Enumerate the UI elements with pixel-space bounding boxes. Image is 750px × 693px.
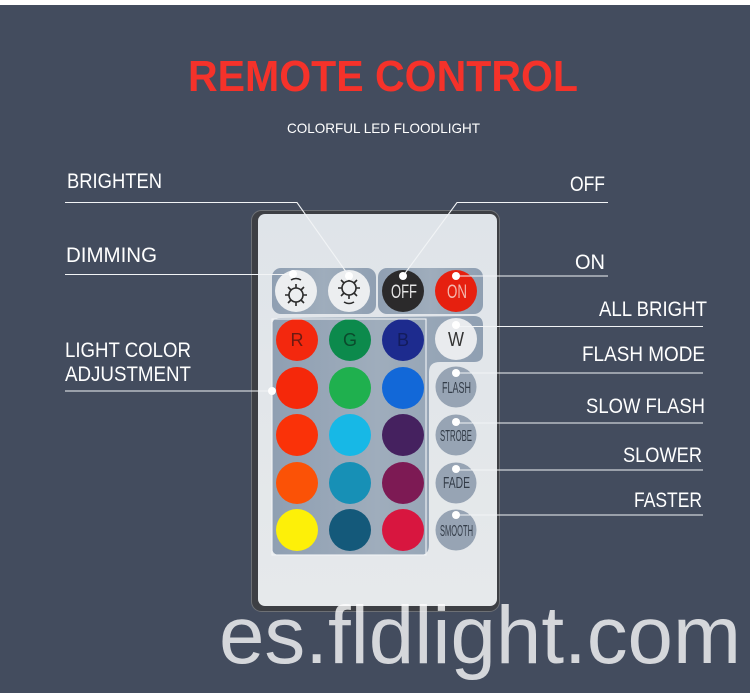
label: ON: ON <box>447 282 467 303</box>
left labels: LIGHT COLOR <box>65 339 191 362</box>
left labels: ADJUSTMENT <box>65 363 191 386</box>
colour buttons grid: G <box>343 330 357 350</box>
right labels: SLOW FLASH <box>586 395 705 418</box>
right labels: FLASH MODE <box>582 343 705 366</box>
icon: brighten sun <box>285 278 307 306</box>
labels: R G B: R <box>290 330 304 350</box>
right labels <box>570 173 707 512</box>
colour buttons grid <box>276 319 424 551</box>
mode buttons <box>436 366 476 550</box>
watermark: es.fldlight.com <box>219 590 741 681</box>
subtitle: COLORFUL LED FLOODLIGHT <box>287 120 480 136</box>
callout lines and dots <box>65 202 703 555</box>
right labels: ON <box>575 251 605 274</box>
right labels: SLOWER <box>623 444 702 467</box>
mode buttons: SMOOTH <box>440 523 473 540</box>
right labels: OFF <box>570 173 605 196</box>
callout dots <box>268 270 460 519</box>
W button: W <box>448 329 464 351</box>
remote control <box>252 210 500 612</box>
top row buttons <box>275 270 477 312</box>
colour buttons grid: B <box>397 330 409 350</box>
mode buttons: FADE <box>443 475 470 492</box>
right labels: FASTER <box>634 489 702 512</box>
icon: dimming sun <box>338 277 360 304</box>
button panels <box>272 268 483 555</box>
left labels <box>65 170 191 386</box>
W button <box>435 318 477 360</box>
remote body <box>252 210 500 612</box>
label: OFF: OFF <box>391 282 417 303</box>
left labels: DIMMING <box>66 244 157 267</box>
title: REMOTE CONTROL <box>188 52 578 101</box>
right labels: ALL BRIGHT <box>599 298 707 321</box>
mode buttons: FLASH <box>442 380 471 397</box>
left labels: BRIGHTEN <box>67 170 162 193</box>
mode buttons: STROBE <box>440 428 472 445</box>
